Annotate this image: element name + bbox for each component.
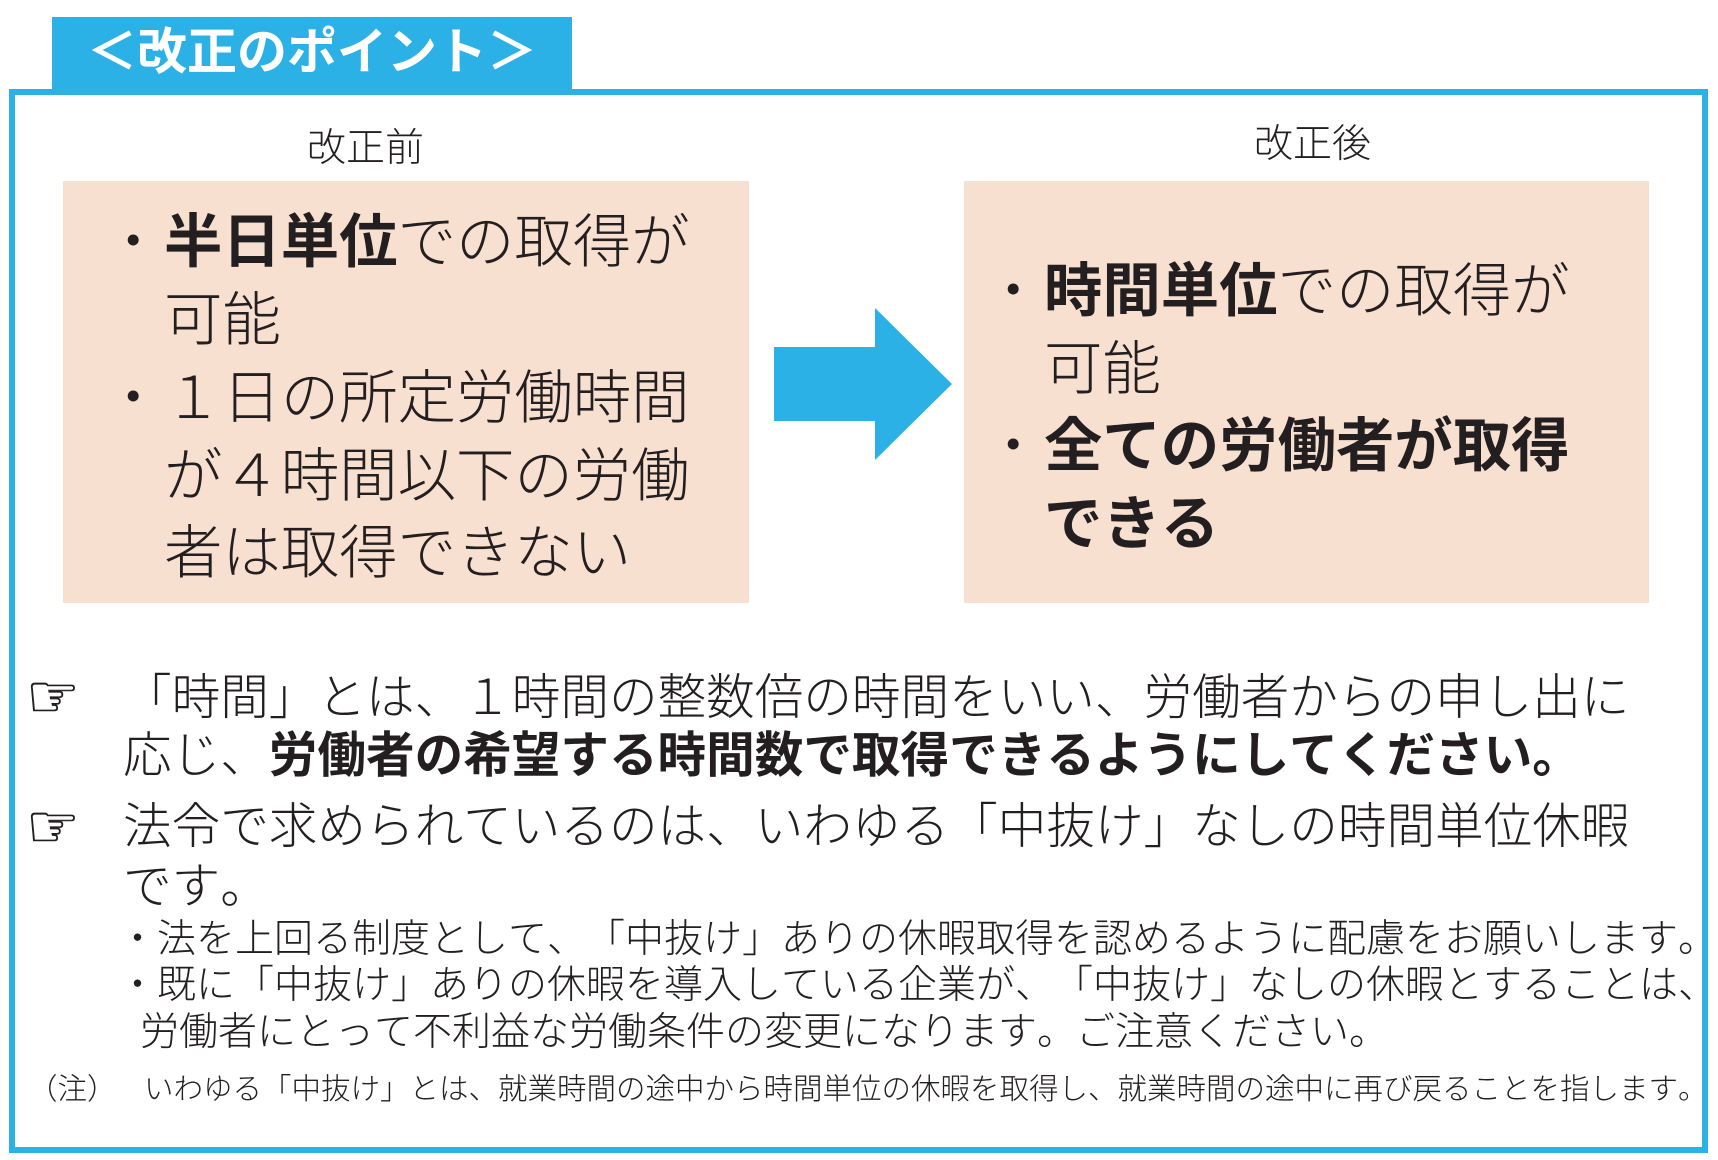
panel: before revision bbox=[63, 181, 749, 603]
text: law requirement line 2: です。 bbox=[123, 860, 269, 914]
text: sub-note 2: ・既に「中抜け」ありの休暇を導入している企業が、「中抜け」なしの休暇とすることは、 bbox=[118, 964, 1717, 1007]
panel: after revision bbox=[964, 181, 1649, 603]
bullet text: half-day unit: ・ bbox=[104, 210, 162, 275]
bullet text: hourly unit: ・ bbox=[984, 259, 1042, 324]
bullet text: all workers: 全ての労働者が取得 bbox=[1044, 414, 1570, 479]
text: sub-note 2 continued: 労働者にとって不利益な労働条件の変更になります。ご注意ください。 bbox=[140, 1011, 1388, 1054]
bullet text: half-day unit: 半日単位での取得が bbox=[164, 210, 690, 275]
icon: pointing hand 2: ☞ bbox=[26, 792, 80, 862]
arrow bbox=[774, 308, 952, 460]
text: sub-note 1: ・法を上回る制度として、「中抜け」ありの休暇取得を認めるように配慮をお願いします。 bbox=[118, 918, 1717, 961]
text: law requirement line 1: 法令で求められているのは、いわゆる「中抜け」なしの時間単位休暇 bbox=[123, 800, 1629, 854]
bullet text: hourly unit: 時間単位での取得が bbox=[1044, 259, 1570, 324]
heading tab: ＜改正のポイント＞ bbox=[87, 24, 537, 80]
bullet text: four hours or less: ・ bbox=[104, 366, 162, 431]
label: after revision: 改正後 bbox=[1254, 123, 1371, 166]
text: meaning of hour line 1: 「時間」とは、１時間の整数倍の時間をいい、労働者からの申し出に bbox=[123, 671, 1629, 725]
bullet text: four hours or less: １日の所定労働時間 bbox=[164, 366, 690, 431]
bullet text: all workers: ・ bbox=[984, 414, 1042, 479]
text: footnote label: （注） bbox=[28, 1073, 117, 1106]
text: footnote: いわゆる「中抜け」とは、就業時間の途中から時間単位の休暇を取得し、就業時間の途中に再び戻ることを指します。 bbox=[144, 1073, 1708, 1106]
text: continuation line: 者は取得できない bbox=[164, 521, 631, 586]
label: before revision: 改正前 bbox=[307, 127, 424, 170]
text: possible: 可能 bbox=[1044, 337, 1161, 402]
text: can take: できる bbox=[1044, 492, 1219, 557]
text: possible: 可能 bbox=[164, 288, 281, 353]
text: meaning of hour line 2: 応じ、労働者の希望する時間数で取得できるようにしてください。 bbox=[123, 729, 1581, 783]
text: continuation line: が４時間以下の労働 bbox=[164, 444, 690, 509]
icon: pointing hand 1: ☞ bbox=[26, 662, 80, 732]
heading tab bbox=[52, 17, 572, 89]
